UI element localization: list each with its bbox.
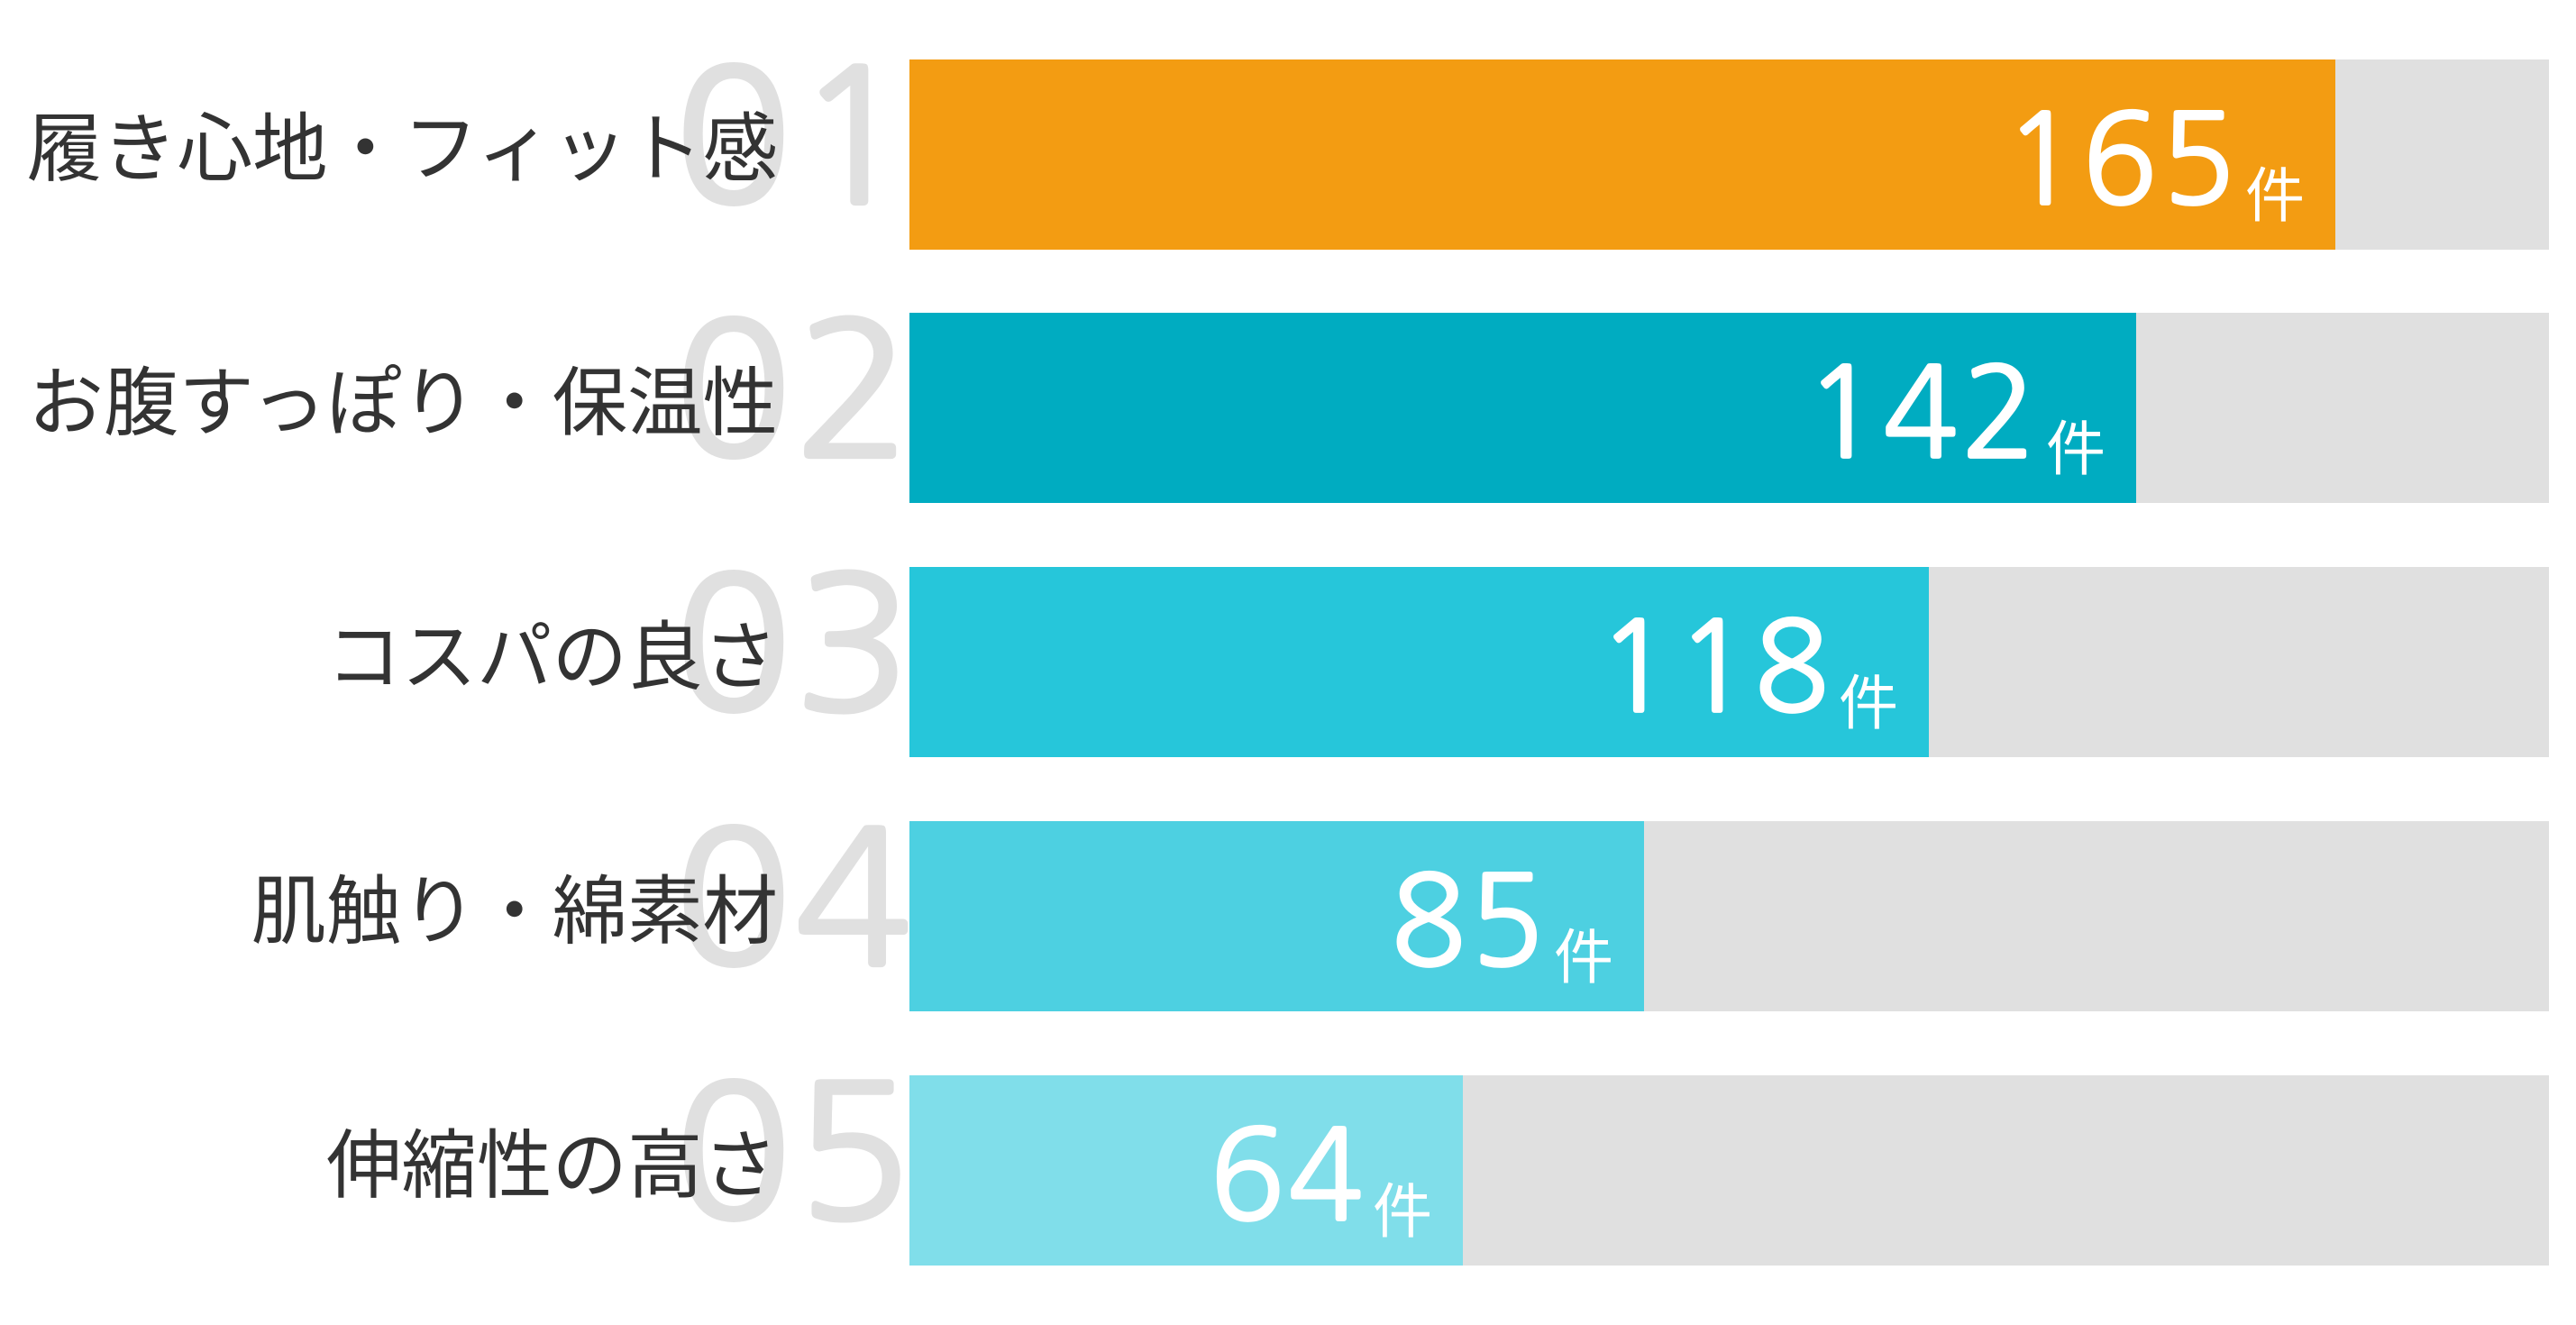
value: 85: [1391, 859, 1545, 983]
rank number 03: 03: [674, 553, 912, 737]
unit: 件: [1554, 924, 1613, 991]
row 3: コスパの良さ: [326, 553, 2549, 757]
row 1: 履き心地・フィット感: [27, 45, 2549, 250]
unit: 件: [1839, 670, 1898, 736]
rank number 04: 04: [674, 807, 912, 991]
unit: 件: [2046, 416, 2106, 482]
bar: [909, 59, 2335, 250]
unit: 件: [1373, 1178, 1432, 1245]
value: 118: [1597, 605, 1830, 729]
bar: [909, 313, 2136, 503]
label: 履き心地・フィット感: [27, 106, 778, 191]
value: 64: [1210, 1113, 1364, 1238]
bar: [909, 1075, 1463, 1266]
track: [909, 821, 2549, 1011]
unit: 件: [2245, 162, 2305, 229]
rank number 01: 01: [674, 45, 912, 230]
row 5: 伸縮性の高さ: [326, 1061, 2549, 1266]
row 2: お腹すっぽり・保温性: [28, 298, 2549, 503]
rank number 02: 02: [674, 298, 912, 483]
track: [909, 313, 2549, 503]
track: [909, 1075, 2549, 1266]
track: [909, 59, 2549, 250]
bar: [909, 567, 1929, 757]
value: 165: [2004, 97, 2236, 222]
label: 伸縮性の高さ: [326, 1123, 778, 1208]
value: 142: [1804, 351, 2037, 475]
row 4: 肌触り・綿素材: [251, 807, 2549, 1011]
bar: [909, 821, 1644, 1011]
rank number 05: 05: [674, 1061, 912, 1246]
track: [909, 567, 2549, 757]
label: コスパの良さ: [326, 615, 778, 699]
label: 肌触り・綿素材: [251, 869, 778, 954]
label: お腹すっぽり・保温性: [28, 361, 778, 445]
